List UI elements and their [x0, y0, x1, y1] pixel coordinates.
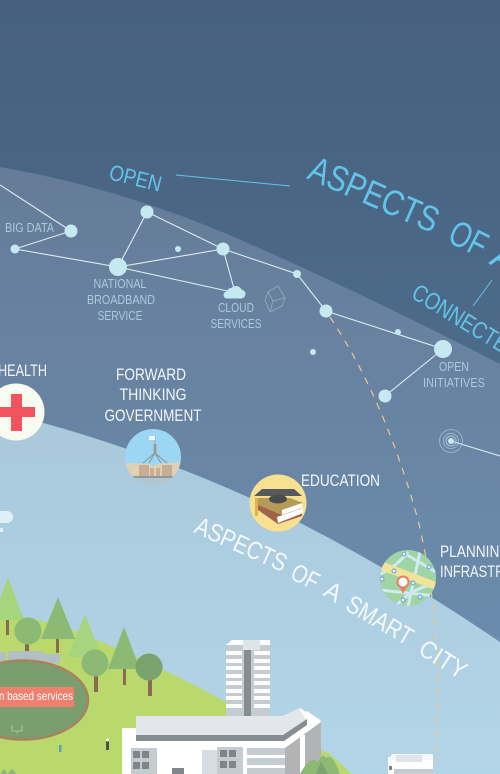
label: national broadband service	[87, 277, 155, 323]
label: open initiatives	[423, 360, 485, 390]
label: planning and infrastructure	[440, 543, 500, 581]
label: open initiatives: INITIATIVES	[423, 376, 485, 390]
label: forward thinking government: GOVERNMENT	[104, 407, 202, 425]
tower	[226, 640, 270, 716]
icon: city map	[379, 549, 437, 607]
band: digital atmosphere	[0, 167, 500, 774]
pointer line: connected	[473, 280, 492, 306]
icon: education books	[250, 474, 306, 532]
label: national broadband service: BROADBAND	[87, 293, 155, 307]
heading: aspects of a connected: ASPECTS	[303, 148, 446, 241]
callout: location based services	[0, 687, 74, 707]
heading: aspects of a smart city: A	[319, 576, 347, 608]
icon: parliament house	[125, 429, 181, 486]
label: national broadband service: NATIONAL	[94, 277, 147, 291]
bushes	[300, 756, 340, 774]
icon: health cross	[0, 384, 44, 440]
stadium	[0, 660, 88, 740]
heading: aspects of a smart city: OF	[286, 558, 324, 596]
heading: aspects of a smart city	[191, 512, 472, 685]
label: cloud services: SERVICES	[210, 317, 262, 331]
label: cloud services	[210, 301, 262, 331]
small building	[388, 754, 433, 774]
heading: aspects of a smart city: ASPECTS	[191, 512, 291, 578]
label: forward thinking government	[104, 366, 202, 425]
label: big data: BIG DATA	[5, 221, 55, 235]
stadium seating	[0, 651, 60, 663]
band: smart city sky	[0, 412, 500, 774]
heading: aspects of a smart city: CITY	[414, 634, 472, 685]
label: open initiatives: OPEN	[439, 360, 469, 374]
constellation network	[0, 185, 500, 456]
label: forward thinking government: FORWARD	[116, 366, 186, 384]
heading: aspects of a connected	[303, 148, 500, 282]
heading: aspects of a smart city: SMART	[341, 590, 418, 651]
green hill	[0, 612, 352, 774]
trees	[0, 577, 162, 696]
small white cloud	[0, 511, 13, 532]
label: cloud services: CLOUD	[218, 301, 254, 315]
label: education: EDUCATION	[301, 472, 380, 490]
bushes bottom left	[1, 770, 16, 774]
icon: cube	[265, 286, 285, 312]
icon: cloud	[224, 286, 246, 298]
route: dashed line	[330, 317, 437, 762]
goal post	[12, 725, 22, 734]
icon: signal rings	[440, 430, 462, 452]
main building	[122, 708, 321, 774]
label: national broadband service: SERVICE	[98, 309, 142, 323]
heading: open: OPEN	[107, 160, 164, 197]
people	[59, 738, 109, 752]
pointer line: open	[176, 175, 290, 186]
label: forward thinking government: THINKING	[120, 386, 186, 404]
